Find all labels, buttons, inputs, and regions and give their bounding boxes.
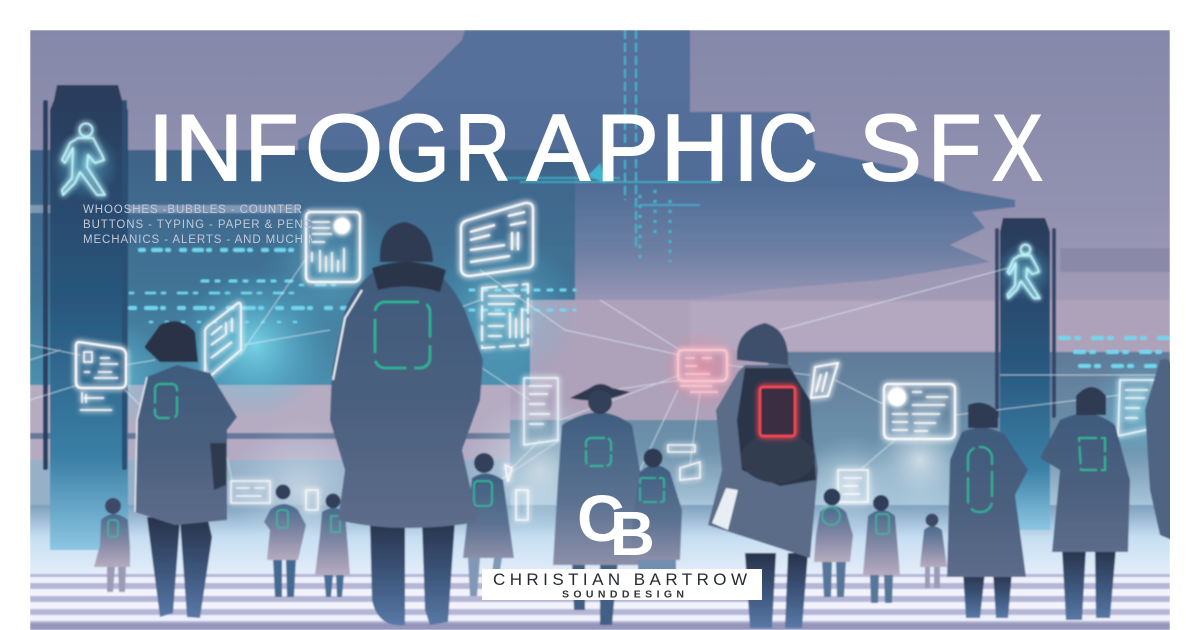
subtitle: sound effect list: BUTTONS - TYPING - PAPER & PENCIL - [83, 219, 333, 231]
logo: CB monogram: B [610, 500, 655, 569]
title: H [661, 95, 729, 200]
teal light dots [130, 250, 1170, 366]
person: right foreground 2 [1040, 387, 1130, 620]
title: O [305, 95, 383, 200]
title: P [596, 95, 659, 200]
hologram screen: small slanted [811, 363, 838, 398]
logo: name plate [482, 569, 762, 600]
title: I [733, 95, 759, 200]
background: left blue band [30, 150, 575, 385]
logo: name plate: CHRISTIAN BARTROW [493, 570, 750, 589]
title: F [245, 96, 298, 201]
title: S [859, 95, 922, 200]
logo: CB monogram [577, 481, 655, 569]
person: small by panel [264, 484, 306, 597]
title: G [386, 95, 450, 200]
background: far right band [1060, 248, 1170, 272]
title [148, 95, 1043, 201]
hologram screen: top left [306, 212, 360, 282]
logo: CB monogram: C [577, 481, 625, 555]
person: centre right mid [630, 448, 682, 575]
network lines [30, 260, 1170, 480]
background: bright floor [30, 505, 1170, 577]
background: lower blue hall [509, 351, 1170, 506]
person: left foreground with hat [135, 321, 237, 618]
person: backpack with red light [708, 323, 818, 628]
title: X [992, 96, 1043, 201]
background: lavender wall centre right [529, 299, 1170, 386]
icon: green bracket large [375, 302, 430, 368]
icon: green bracket [155, 384, 177, 418]
icon: walking figure, right [1008, 245, 1040, 298]
teal circuit lines on tower [500, 30, 720, 262]
person: right small 2 [863, 495, 900, 603]
hologram screen: lower right panel [505, 445, 868, 520]
hologram screen: centre small [524, 378, 558, 445]
subtitle: sound effect list [83, 204, 346, 246]
title: A [527, 95, 590, 200]
person: centre with hat [553, 384, 640, 625]
icon: walking figure, left [62, 124, 105, 195]
title: I [148, 95, 174, 200]
title: C [758, 95, 818, 200]
person: small far left [94, 498, 130, 592]
title: F [928, 96, 981, 201]
hologram screen: centre lower [482, 284, 528, 348]
traffic signal post: right [994, 218, 1056, 530]
person: right small 1 [814, 488, 853, 597]
background: lower left hall [30, 460, 510, 506]
traffic signal post: left [43, 85, 128, 550]
person: far right edge [1145, 359, 1172, 540]
hologram screen: left tall [205, 303, 241, 378]
background: light strip [30, 205, 300, 213]
background: dark brushed tower [298, 30, 1016, 300]
title: R [455, 96, 510, 201]
crosswalk stripes [30, 574, 1170, 630]
hologram screen: far left [76, 342, 126, 410]
person: centre foreground [330, 222, 483, 625]
hologram screen: far right [1118, 380, 1155, 436]
glow: teal halos [127, 220, 1155, 528]
icon: red neon panel [760, 387, 795, 436]
title: N [175, 95, 243, 200]
person: small light coat [315, 494, 350, 597]
person: right small 3 [920, 514, 947, 588]
person: centre left mid [463, 453, 514, 596]
hologram screen: top centre [461, 203, 533, 276]
person: right foreground 1 [947, 403, 1028, 618]
background: pale lavender bands [30, 385, 510, 433]
logo: name plate: SOUNDDESIGN [562, 588, 684, 600]
hologram screen: right large [884, 384, 955, 439]
subtitle: sound effect list: WHOOSHES -BUBBLES - COUNTER - [83, 204, 312, 216]
subtitle: sound effect list: MECHANICS - ALERTS - AND MUCH MORE [83, 234, 346, 246]
hologram screen: pink alert [668, 336, 736, 404]
hologram screen: lower left panel [231, 481, 318, 510]
